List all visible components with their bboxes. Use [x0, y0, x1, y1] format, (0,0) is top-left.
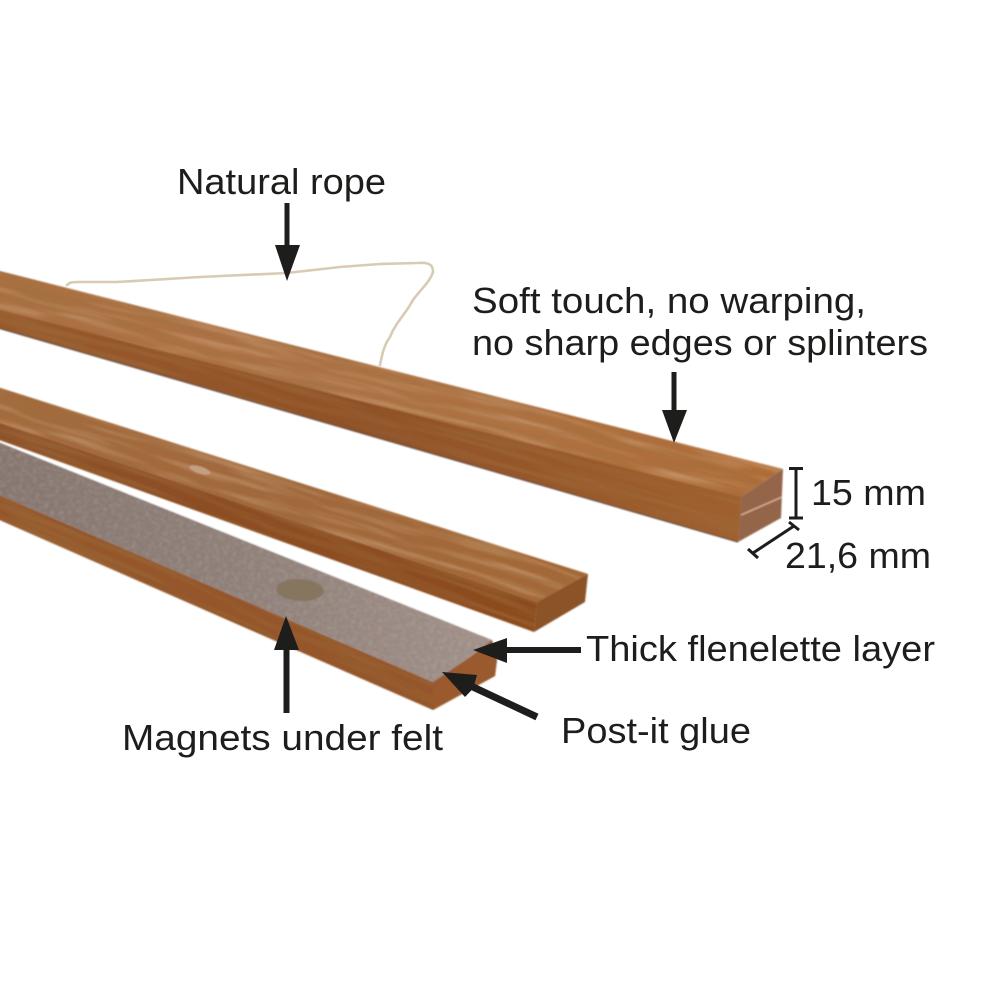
- arrow: flannelette layer: [473, 638, 581, 663]
- rope: [67, 263, 433, 365]
- arrow: natural rope: [275, 203, 300, 281]
- top wooden bar: [0, 270, 784, 544]
- felt knot: [275, 578, 325, 602]
- arrow: soft touch: [662, 372, 687, 443]
- lower bar with felt: [0, 442, 498, 711]
- label: soft touch: Soft touch, no warping,: [472, 280, 866, 321]
- dimension: width bracket: [748, 522, 799, 558]
- dimension: height bracket: [789, 468, 803, 518]
- label: soft touch: [472, 280, 928, 363]
- label: magnets under felt: Magnets under felt: [122, 717, 443, 758]
- label: flannelette layer: Thick flenelette layer: [586, 628, 935, 669]
- label: soft touch: no sharp edges or splinters: [472, 322, 928, 363]
- arrow: post-it glue: [442, 672, 538, 720]
- label: natural rope: Natural rope: [177, 161, 386, 202]
- label: 15 mm: 15 mm: [811, 472, 926, 513]
- middle wooden bar: [0, 386, 589, 633]
- label: 21,6 mm: 21,6 mm: [785, 535, 931, 576]
- label: post-it glue: Post-it glue: [561, 710, 751, 751]
- arrow: magnets: [274, 616, 299, 713]
